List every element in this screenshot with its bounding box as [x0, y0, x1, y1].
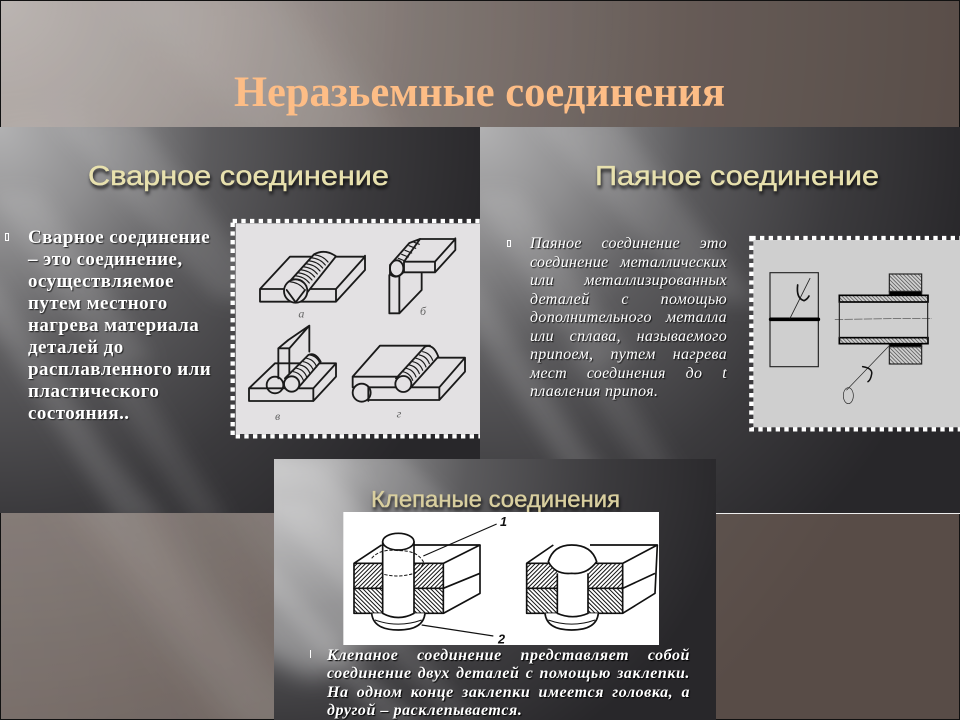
text: soldered joint definition: мест соединения до t: [530, 364, 727, 382]
figure г: [353, 346, 465, 402]
white divider line: [480, 513, 960, 514]
text: soldered joint definition: Паяное соединение это: [530, 235, 727, 252]
diagram: welded joints а б в г: а: [298, 306, 304, 320]
figure б: [389, 238, 455, 313]
rivet before forming: [354, 524, 497, 636]
butt joint sketch: [770, 273, 818, 367]
text: riveted joint definition: соединение двух деталей с помощью заклепки.: [327, 665, 690, 682]
heading: riveted joints: Клепаные соединения: [371, 486, 620, 512]
bullet: [310, 650, 311, 658]
text: welded joint definition: расплавленного или: [28, 359, 211, 380]
diagram: welded joints а б в г: [230, 218, 480, 438]
figure в: [249, 326, 336, 401]
text: soldered joint definition: припоем, путем нагрева: [530, 346, 727, 363]
text: welded joint definition: путем местного: [28, 293, 168, 314]
diagram: welded joints а б в г: б: [420, 304, 427, 318]
text: riveted joint definition: Клепаное соединение представляет собой: [327, 647, 690, 664]
title: Неразьемные соединения: [234, 69, 725, 116]
text: welded joint definition: осуществляемое: [28, 271, 174, 292]
panel: riveted joint: [274, 459, 716, 720]
text: riveted joint definition: [326, 647, 690, 720]
text: welded joint definition: – это соединение,: [28, 249, 183, 270]
diagram: rivet before and after: 2: [497, 632, 505, 646]
text: soldered joint definition: плавления припоя.: [530, 383, 658, 400]
diagram: welded joints а б в г: г: [397, 406, 402, 420]
sleeve joint sketch: [835, 274, 932, 404]
text: soldered joint definition: [530, 235, 728, 401]
text: welded joint definition: нагрева материала: [28, 315, 199, 336]
bullet: [5, 233, 9, 241]
diagram: soldered joint: [749, 236, 960, 432]
heading: soldered joint: Паяное соединение: [595, 160, 879, 191]
text: welded joint definition: [28, 227, 212, 424]
panel: soldered joint: [480, 127, 960, 513]
text: riveted joint definition: На одном конце заклепки имеется головка, а: [327, 684, 690, 701]
text: riveted joint definition: другой – расклепывается.: [327, 702, 522, 719]
bullet: [507, 240, 511, 247]
text: welded joint definition: Сварное соединение: [28, 227, 210, 248]
diagram: rivet before and after: 1: [500, 515, 507, 529]
text: welded joint definition: состояния..: [28, 403, 130, 424]
figure а: [260, 252, 365, 303]
text: welded joint definition: деталей до: [28, 337, 124, 358]
text: soldered joint definition: соединение металлических: [530, 254, 727, 270]
heading: welded joint: Сварное соединение: [88, 160, 389, 191]
text: welded joint definition: пластического: [28, 381, 159, 402]
diagram: rivet before and after: [343, 512, 659, 646]
text: soldered joint definition: деталей с помощью: [530, 290, 727, 308]
text: soldered joint definition: дополнительного металла: [530, 309, 727, 326]
text: soldered joint definition: или металлизированных: [530, 272, 727, 289]
rivet after forming: [527, 545, 657, 630]
panel: welded joint: [0, 127, 480, 513]
diagram: welded joints а б в г: в: [275, 409, 280, 423]
text: soldered joint definition: или сплава, называемого: [530, 328, 727, 344]
